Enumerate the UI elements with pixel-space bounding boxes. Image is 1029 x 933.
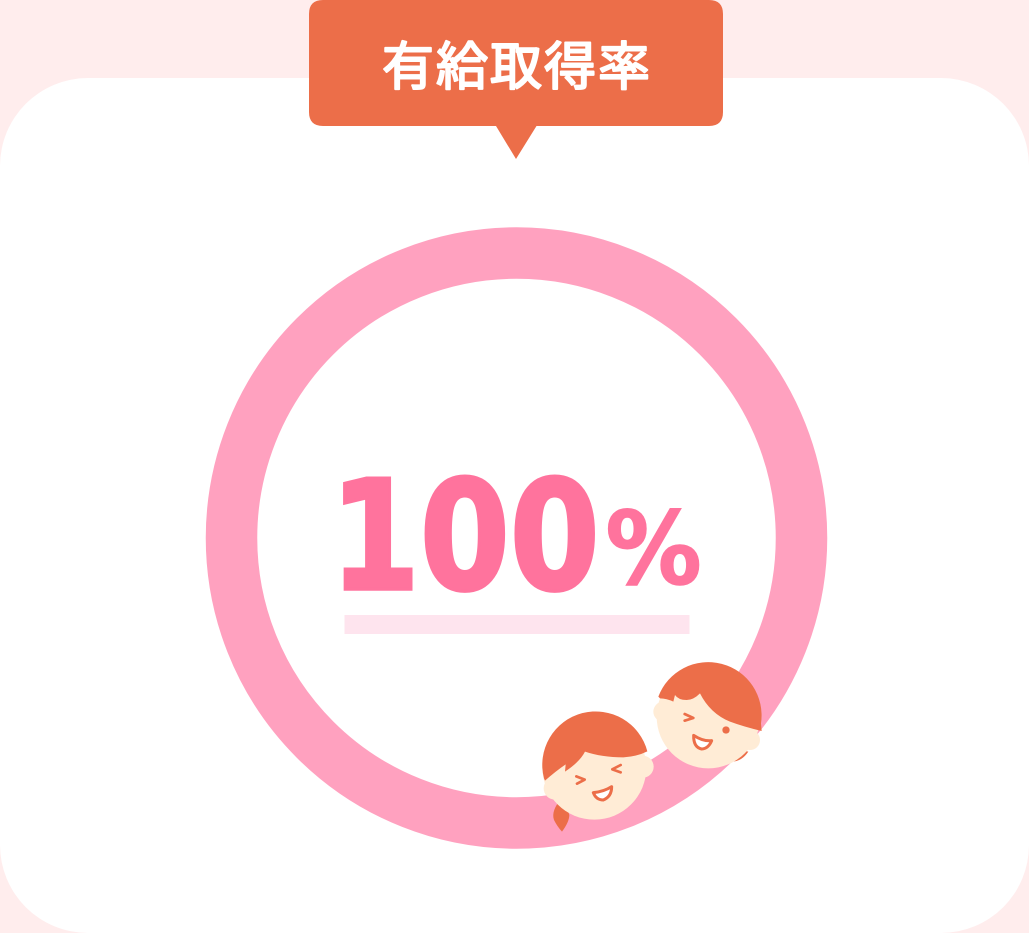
heading: speech bubble title: 有給取得率 <box>382 39 652 97</box>
chart: donut ring <box>232 253 802 823</box>
icon: girl face <box>542 711 654 832</box>
underline bar <box>344 615 690 634</box>
icon: boy face <box>653 662 762 768</box>
value: 100 percent: 100 <box>330 449 600 626</box>
value: 100 percent: % <box>606 491 702 608</box>
heading: speech bubble title <box>309 0 723 159</box>
